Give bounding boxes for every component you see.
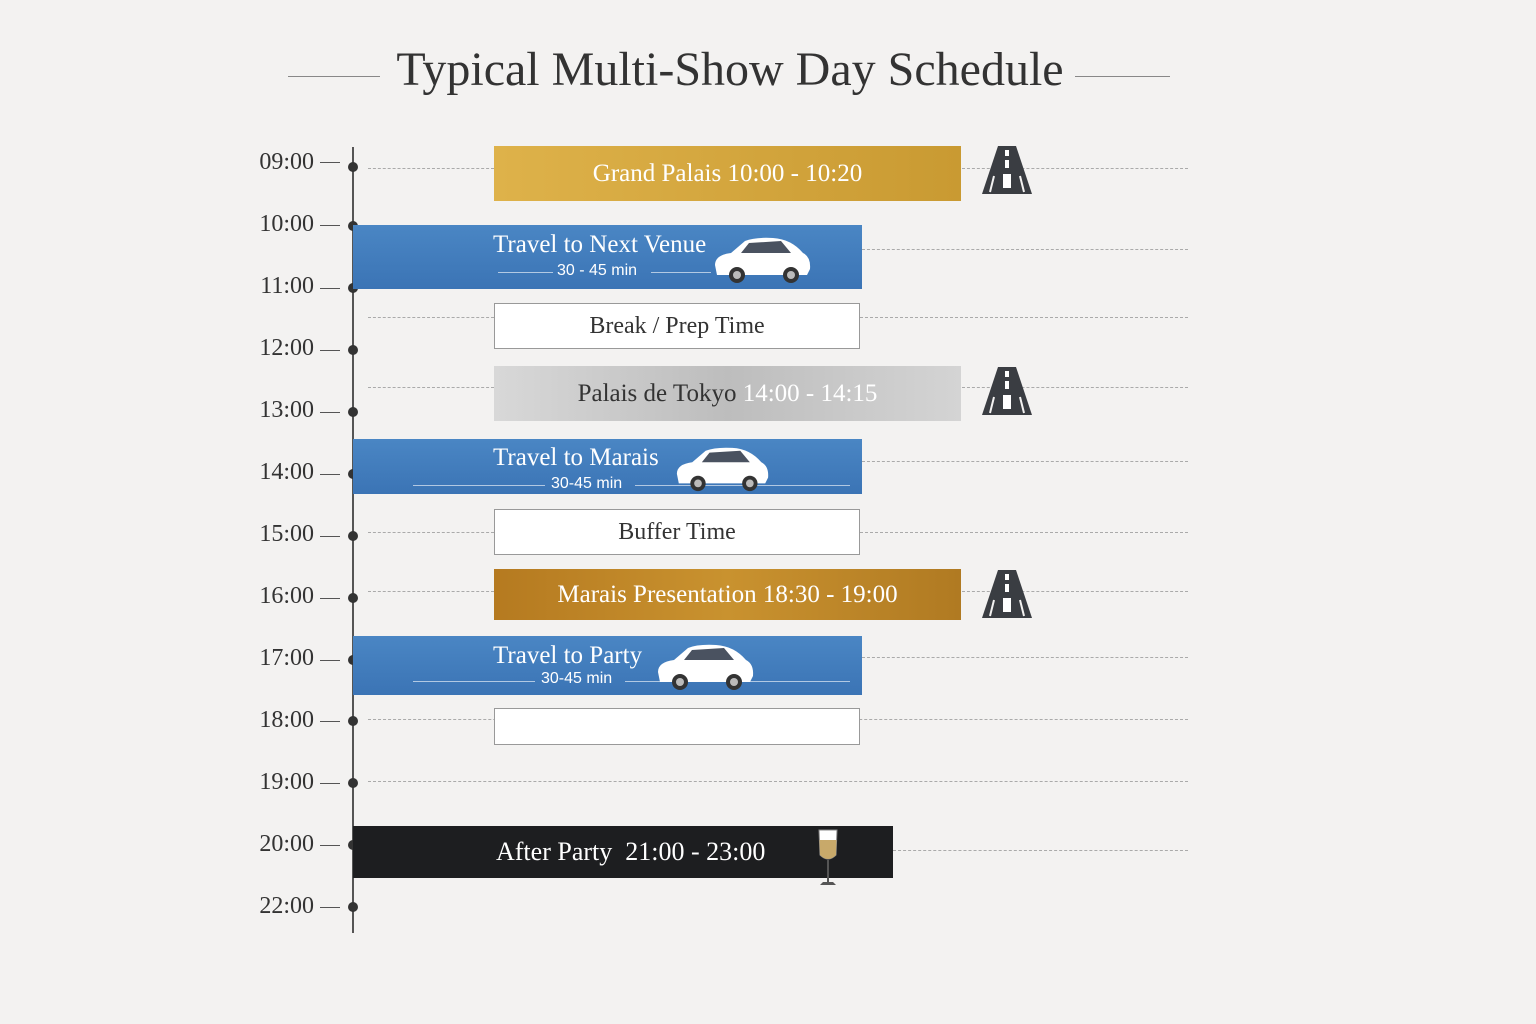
text: 14:00 <box>259 459 314 485</box>
block: break: Break / Prep Time <box>589 312 765 338</box>
text: 18:00 <box>259 707 314 733</box>
icon: car <box>715 238 810 283</box>
block: empty slot <box>494 708 860 745</box>
block: Grand Palais <box>494 146 961 201</box>
timeline axis <box>352 147 354 933</box>
block: travel to marais: 30-45 min <box>551 475 622 492</box>
dashed grid <box>368 168 494 169</box>
block: Palais de Tokyo: Palais de Tokyo <box>578 380 736 406</box>
block: travel to next venue: 30 - 45 min <box>557 262 637 279</box>
block: buffer: Buffer Time <box>618 518 736 544</box>
block: travel to marais <box>353 439 862 494</box>
block: Palais de Tokyo: 14:00 - 14:15 <box>743 380 877 406</box>
text: 13:00 <box>259 397 314 423</box>
block: travel to party <box>353 636 862 695</box>
text: 09:00 <box>259 149 314 175</box>
block: after party: After Party 21:00 - 23:00 <box>496 837 765 866</box>
icon: road 1 <box>982 146 1032 194</box>
block: travel to marais: Travel to Marais <box>493 444 659 471</box>
block: buffer <box>494 509 860 555</box>
icon: car <box>676 448 768 492</box>
block: after party <box>353 826 893 878</box>
text: 15:00 <box>259 521 314 547</box>
text: 19:00 <box>259 769 314 795</box>
text: 16:00 <box>259 583 314 609</box>
block: Marais presentation <box>494 569 961 620</box>
block: Grand Palais: Grand Palais 10:00 - 10:20 <box>593 160 862 186</box>
block: Marais presentation: Marais Presentation 18:30 - 19:00 <box>557 580 898 608</box>
block: travel to next venue <box>353 225 862 289</box>
icon: car <box>658 644 754 690</box>
text: 12:00 <box>259 335 314 361</box>
icon: road 2 <box>982 367 1032 415</box>
icon: road 3 <box>982 570 1032 618</box>
time labels <box>230 150 360 920</box>
block: travel to party: Travel to Party <box>493 642 642 669</box>
text: 11:00 <box>260 273 314 299</box>
block: travel to party: 30-45 min <box>541 670 612 687</box>
block: travel to next venue: Travel to Next Venue <box>493 231 706 258</box>
block: break <box>494 303 860 349</box>
text: 10:00 <box>259 211 314 237</box>
block: Palais de Tokyo <box>494 366 961 421</box>
text: 22:00 <box>259 893 314 919</box>
title: Typical Multi-Show Day Schedule <box>396 43 1064 96</box>
text: 17:00 <box>259 645 314 671</box>
text: 20:00 <box>259 831 314 857</box>
icon: champagne glass <box>818 830 838 885</box>
